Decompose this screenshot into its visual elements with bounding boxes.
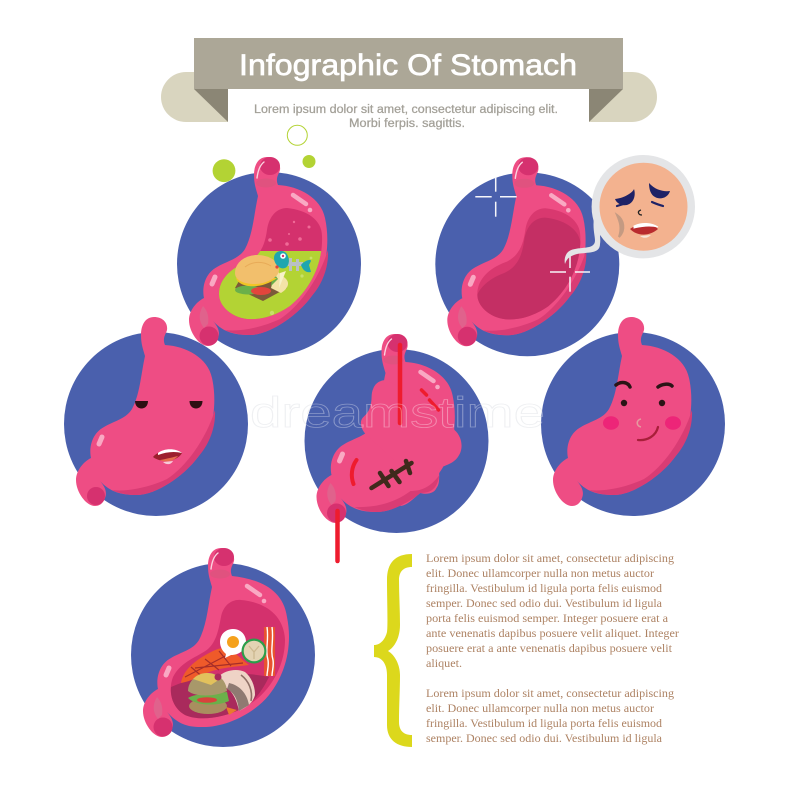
background circle xyxy=(177,172,361,356)
subtitle: Lorem ipsum dolor sit amet, consectetur adipiscing elit. xyxy=(254,104,558,116)
fold left xyxy=(194,89,228,122)
background circle xyxy=(435,172,619,356)
text block: paragraph two: elit. Donec ullamcorper nulla non metus auctor xyxy=(426,702,654,715)
face xyxy=(600,163,688,251)
sparkle left xyxy=(475,177,517,217)
text block: paragraph one: ante venenatis dapibus posuere velit aliquet. Integer xyxy=(426,627,679,640)
smile xyxy=(638,427,658,440)
banner bar xyxy=(194,38,623,89)
text block: paragraph two: semper. Donec sed odio dui. Vestibulum id ligula xyxy=(426,732,662,745)
panel: empty stomach with pain xyxy=(435,157,619,356)
text block: paragraph one: aliquet. xyxy=(426,657,462,670)
watermark backing behind center panel: dreamstime xyxy=(250,389,545,437)
panel: bubbles and full stomach with burger and fish xyxy=(177,125,361,356)
ribbon end left xyxy=(161,72,251,122)
callout: sad face bubble xyxy=(565,155,695,264)
stomach xyxy=(143,548,289,737)
chicken xyxy=(218,670,255,715)
background circle xyxy=(131,563,315,747)
panel: cheerful stomach xyxy=(541,317,725,516)
watermark: dreamstime xyxy=(250,389,545,437)
eyebrows xyxy=(616,383,672,387)
stitches xyxy=(372,461,412,488)
banner xyxy=(161,38,657,135)
fish skeleton xyxy=(274,251,311,272)
background circle xyxy=(304,349,488,533)
text block: paragraph one: semper. Donec sed odio dui. Vestibulum id ligula xyxy=(426,597,662,610)
panel: stomach full of food xyxy=(131,548,315,747)
title: Infographic Of Stomach xyxy=(239,49,577,82)
steak xyxy=(181,648,249,683)
text block: paragraph one: porta felis euismod semper. Integer posuere erat a xyxy=(426,612,668,625)
panel: injured stomach xyxy=(304,334,488,561)
mouth xyxy=(630,223,658,238)
text block: paragraph one: posuere erat a ante venenatis dapibus posuere velit xyxy=(426,642,673,655)
subtitle: Morbi ferpis. sagittis. xyxy=(349,118,465,130)
text block: paragraph one: fringilla. Vestibulum id ligula porta felis euismod xyxy=(426,582,662,595)
stomach xyxy=(189,157,329,346)
eyes xyxy=(135,401,202,408)
eyes xyxy=(621,400,665,406)
text block: paragraph one: Lorem ipsum dolor sit amet, consectetur adipiscing xyxy=(426,552,674,565)
subtitle backing xyxy=(228,85,589,135)
bruise xyxy=(617,215,623,237)
stomach xyxy=(447,157,586,346)
swollen stomach xyxy=(316,334,462,523)
text block: paragraph one: elit. Donec ullamcorper nulla non metus auctor xyxy=(426,567,654,580)
brows and eyes xyxy=(615,183,670,205)
stomach xyxy=(553,317,692,506)
text block: paragraph two: fringilla. Vestibulum id ligula porta felis euismod xyxy=(426,717,662,730)
sparkle right xyxy=(550,253,590,292)
background circle xyxy=(64,332,248,516)
burger xyxy=(188,673,229,714)
fold right xyxy=(589,89,623,122)
burger xyxy=(235,255,288,301)
mouth xyxy=(153,449,182,464)
blood streaks xyxy=(338,345,438,561)
nose xyxy=(638,210,642,215)
egg xyxy=(220,629,246,658)
green acid xyxy=(219,220,322,320)
bracket xyxy=(374,554,412,747)
text block: paragraph two: Lorem ipsum dolor sit amet, consectetur adipiscing xyxy=(426,687,674,700)
cheeks xyxy=(603,416,681,430)
stomach xyxy=(76,317,215,506)
background circle xyxy=(541,332,725,516)
bacon xyxy=(264,627,275,676)
bubbles xyxy=(213,125,316,182)
bubble tail xyxy=(565,218,601,264)
panel: sleepy stomach xyxy=(64,317,248,516)
lime slice xyxy=(242,638,266,664)
ribbon end right xyxy=(567,72,657,122)
nose xyxy=(637,419,641,427)
bubble ring xyxy=(592,155,695,258)
